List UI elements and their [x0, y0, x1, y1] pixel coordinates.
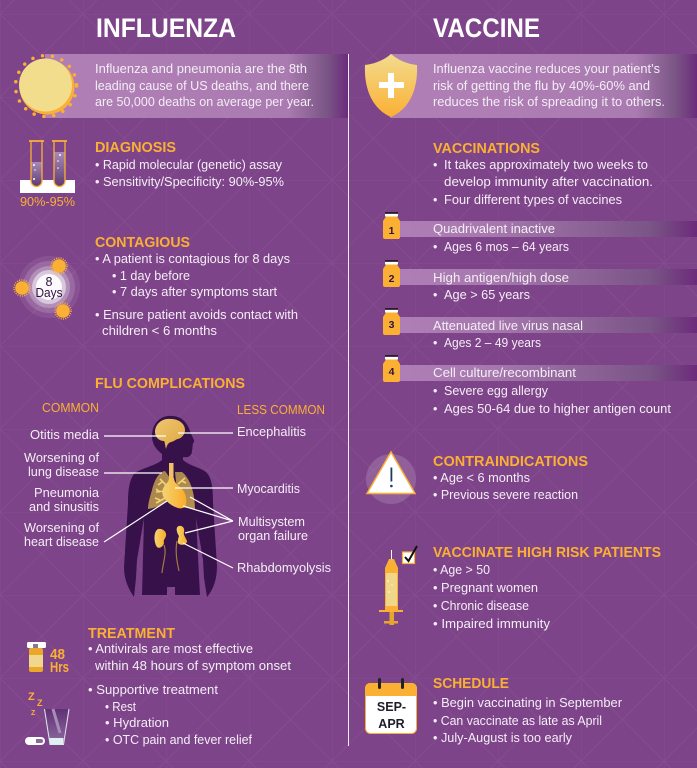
callout lines [104, 433, 233, 568]
labels: less common complications [237, 425, 331, 575]
section: schedule: • Can vaccinate as late as April [433, 714, 602, 728]
vaccine type 4: Ages 50-64 due to higher antigen count [444, 402, 672, 416]
vaccine type 4: Cell culture/recombinant [433, 366, 577, 380]
labels: common complications: Pneumonia [34, 486, 99, 500]
icon: vial 3 [383, 308, 400, 335]
icon: vial 2: 2 [389, 273, 395, 285]
vaccine type 1: • [433, 240, 437, 254]
labels: less common complications: Myocarditis [237, 482, 300, 496]
section: diagnosis [20, 140, 284, 209]
section: schedule: • July-August is too early [433, 731, 573, 745]
icon: calendar [365, 678, 417, 734]
panel: influenza column [14, 13, 348, 747]
labels: less common complications: Encephalitis [237, 425, 306, 439]
icon: vial 3: 3 [389, 319, 395, 331]
section: vaccinations: develop immunity after vaccination. [444, 175, 653, 189]
heading: treatment: TREATMENT [88, 626, 175, 642]
icon: 8 days contagious period: Days [36, 286, 62, 300]
heading: vaccinations: VACCINATIONS [433, 141, 540, 157]
section: treatment: • Hydration [105, 716, 169, 730]
labels: common complications: Worsening of [24, 521, 100, 535]
section: diagnosis: • Sensitivity/Specificity: 90%-95% [95, 175, 284, 189]
labels: less common complications: Rhabdomyolysis [237, 561, 331, 575]
banner: vaccine benefit [390, 54, 697, 118]
icon: pill bottle [27, 642, 46, 672]
label: less common: LESS COMMON [237, 403, 325, 417]
diagram: body silhouette with organs [124, 416, 217, 597]
section: treatment: • Rest [105, 700, 136, 714]
section: contraindications: • Age < 6 months [433, 471, 530, 485]
section: vaccinations: • [433, 158, 437, 172]
banner: influenza statistics [45, 54, 348, 118]
heading: contraindications: CONTRAINDICATIONS [433, 454, 588, 470]
heading: diagnosis: DIAGNOSIS [95, 140, 176, 156]
vaccine type 3 [383, 308, 697, 350]
vaccine type 2: • [433, 288, 437, 302]
banner: vaccine benefit: reduces the risk of spreading it to others. [433, 95, 665, 109]
vaccine type 4 [383, 355, 697, 416]
icon: vial 4: 4 [389, 366, 395, 378]
labels: common complications: lung disease [28, 465, 99, 479]
vaccine type 1 [383, 212, 697, 254]
icon: sleep zzz [28, 691, 43, 717]
banner: influenza statistics: Influenza and pneumonia are the 8th [95, 62, 307, 76]
heading: flu complications: FLU COMPLICATIONS [95, 376, 245, 392]
banner: influenza statistics: leading cause of US deaths, and there [95, 79, 309, 93]
section: vaccinations [433, 141, 653, 207]
vaccine type 4: • [433, 402, 437, 416]
icon: sleep zzz: Z [37, 698, 43, 708]
banner: vaccine benefit: Influenza vaccine reduces your patient’s [433, 62, 660, 76]
section: contagious: • 7 days after symptoms start [112, 285, 278, 299]
icon: calendar: SEP- [377, 700, 406, 714]
labels: common complications [24, 428, 100, 549]
label: 48 hrs: 48 [50, 647, 65, 663]
vaccine type 4: Severe egg allergy [444, 384, 549, 398]
section: contagious: • Ensure patient avoids contact with [95, 308, 298, 322]
section: diagnosis: • Rapid molecular (genetic) assay [95, 158, 283, 172]
icon: 8 days contagious period [14, 256, 80, 319]
labels: common complications: heart disease [24, 535, 99, 549]
section: high risk patients: • Pregnant women [433, 581, 538, 595]
heading: schedule: SCHEDULE [433, 676, 509, 692]
section: treatment: within 48 hours of symptom onset [94, 659, 292, 673]
icon: vial 2 [383, 260, 400, 287]
section: contraindications: • Previous severe reaction [433, 488, 578, 502]
labels: common complications: and sinusitis [29, 500, 99, 514]
vaccine type 3: • [433, 336, 437, 350]
label: 48 hrs [50, 647, 69, 676]
banner: vaccine benefit: risk of getting the flu by 40%-60% and [433, 79, 650, 93]
section: vaccinations: It takes approximately two weeks to [444, 158, 648, 172]
icon: sleep zzz: Z [31, 710, 36, 717]
labels: less common complications: Multisystem [238, 515, 305, 529]
section: treatment: • OTC pain and fever relief [105, 733, 253, 747]
vaccine type 1: Quadrivalent inactive [433, 222, 555, 236]
icon: glass of water [44, 709, 69, 744]
section: contagious: • 1 day before [112, 269, 190, 283]
section: vaccinations: • [433, 193, 437, 207]
icon: shield with cross [365, 54, 417, 117]
title: influenza: INFLUENZA [96, 13, 236, 43]
section: treatment: • Antivirals are most effective [88, 642, 253, 656]
title: vaccine: VACCINE [433, 13, 540, 43]
section: contagious: children < 6 months [102, 324, 217, 338]
icon: flu virus [16, 56, 76, 116]
section: contagious: • A patient is contagious for 8 days [95, 252, 290, 266]
section: high risk patients: • Age > 50 [433, 563, 490, 577]
section: flu complications [24, 376, 331, 597]
icon: vial 1 [383, 212, 400, 239]
icon: pill [25, 737, 45, 745]
icon: checkbox [402, 546, 417, 564]
panel: vaccine column [365, 13, 697, 745]
icon: sleep zzz: Z [28, 691, 35, 703]
label: 48 hrs: Hrs [50, 660, 69, 676]
icon: 8 days contagious period: 8 [46, 275, 53, 289]
icon: calendar: APR [378, 717, 405, 731]
section: high risk patients [379, 545, 661, 631]
vaccine type 2 [383, 260, 697, 302]
labels: less common complications: organ failure [238, 529, 308, 543]
section: high risk patients: • Chronic disease [433, 599, 529, 613]
labels: common complications: Worsening of [24, 451, 100, 465]
vaccine type 2: High antigen/high dose [433, 271, 569, 285]
vaccine type 4: • [433, 384, 437, 398]
icon: test tubes [20, 141, 75, 193]
section: contagious [14, 235, 298, 338]
icon: vial 4 [383, 355, 400, 382]
heading: contagious: CONTAGIOUS [95, 235, 190, 251]
section: treatment: • Supportive treatment [88, 683, 219, 697]
vaccine type 3: Ages 2 – 49 years [444, 336, 541, 350]
vaccine type 1: Ages 6 mos – 64 years [444, 240, 569, 254]
section: contraindications [366, 452, 588, 504]
section: schedule [365, 676, 622, 745]
section: treatment [25, 626, 292, 747]
banner: influenza statistics: are 50,000 deaths on average per year. [95, 95, 314, 109]
heading: vaccinate high risk patients: VACCINATE HIGH RISK PATIENTS [433, 545, 661, 561]
icon: syringe [379, 550, 403, 625]
label: common: COMMON [42, 401, 99, 415]
icon: vial 1: 1 [389, 225, 395, 237]
labels: common complications: Otitis media [30, 428, 99, 442]
section: high risk patients: • Impaired immunity [433, 617, 551, 631]
section: schedule: • Begin vaccinating in September [433, 696, 622, 710]
section: vaccinations: Four different types of vaccines [444, 193, 622, 207]
icon: warning triangle [366, 452, 416, 504]
label: 90%-95%: 90%-95% [20, 195, 75, 209]
vaccine type 3: Attenuated live virus nasal [433, 319, 583, 333]
vaccine type 2: Age > 65 years [444, 288, 530, 302]
